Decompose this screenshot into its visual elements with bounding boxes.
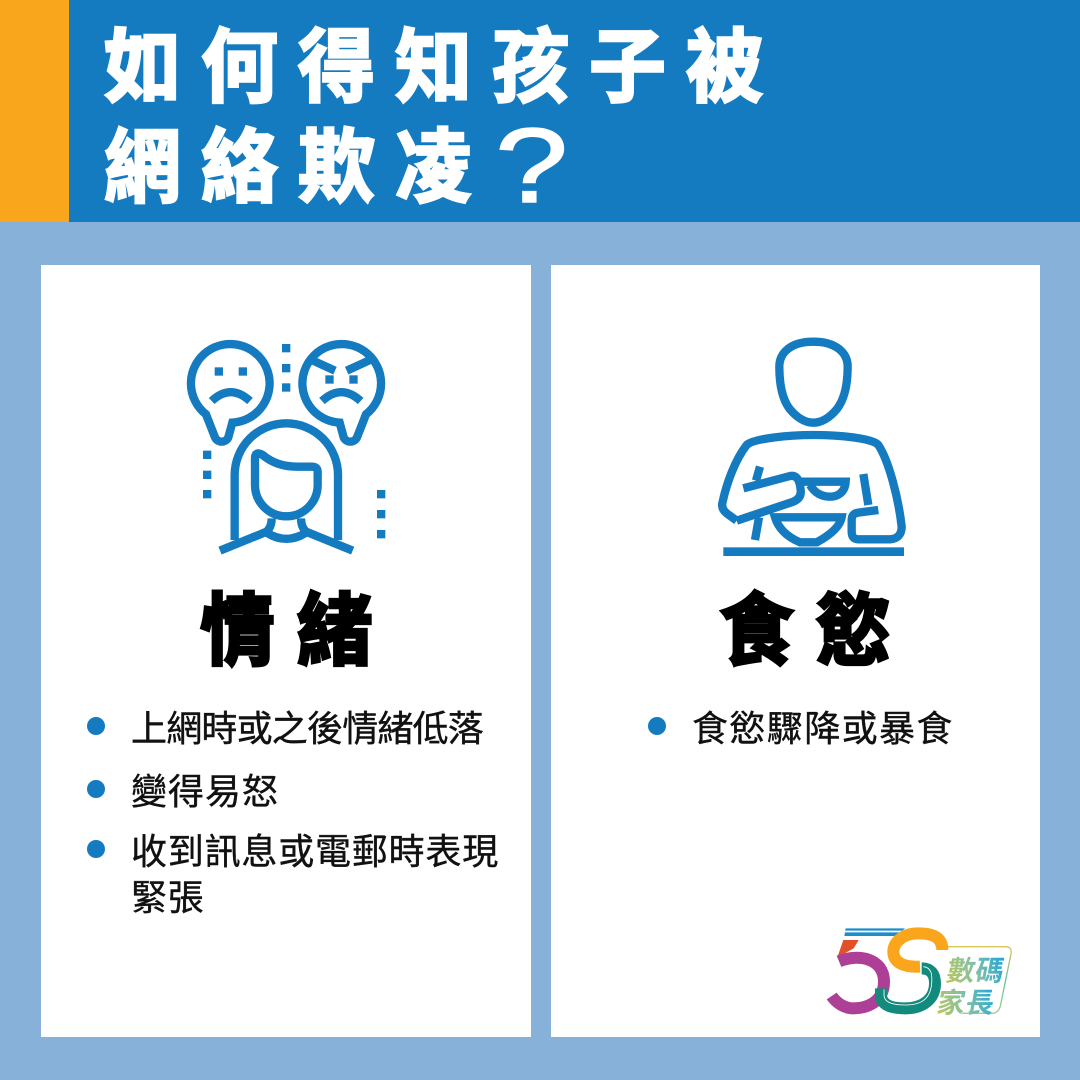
- heading: emotions: 情緒: [200, 587, 394, 675]
- logo: 5S digital parents: 家長: [935, 987, 998, 1019]
- icon: person eating from a bowl: [718, 338, 906, 556]
- title line 2: 網絡欺凌: [104, 123, 492, 213]
- panel: emotions: [41, 265, 531, 1037]
- bullet 1: 上網時或之後情緒低落: [131, 708, 483, 749]
- icon: woman with sad and angry speech bubbles: [186, 340, 386, 554]
- logo: 5S digital parents: [826, 927, 1012, 1019]
- bullet 2: 變得易怒: [131, 771, 279, 812]
- orange accent block: [0, 0, 69, 222]
- header band: [0, 0, 1080, 222]
- panel: appetite: [551, 265, 1040, 1037]
- bullet list: emotions: [87, 708, 499, 918]
- title line 1: 如何得知孩子被: [104, 23, 783, 113]
- bullet 3: 收到訊息或電郵時表現: [131, 831, 499, 872]
- heading: appetite: 食慾: [719, 587, 913, 675]
- bullet 3: [87, 831, 499, 918]
- logo: 5S digital parents: 數碼: [944, 955, 1007, 987]
- bullet list: appetite: 食慾驟降或暴食: [692, 708, 954, 749]
- bullet 3: 緊張: [131, 877, 205, 918]
- title question mark: ?: [495, 107, 568, 225]
